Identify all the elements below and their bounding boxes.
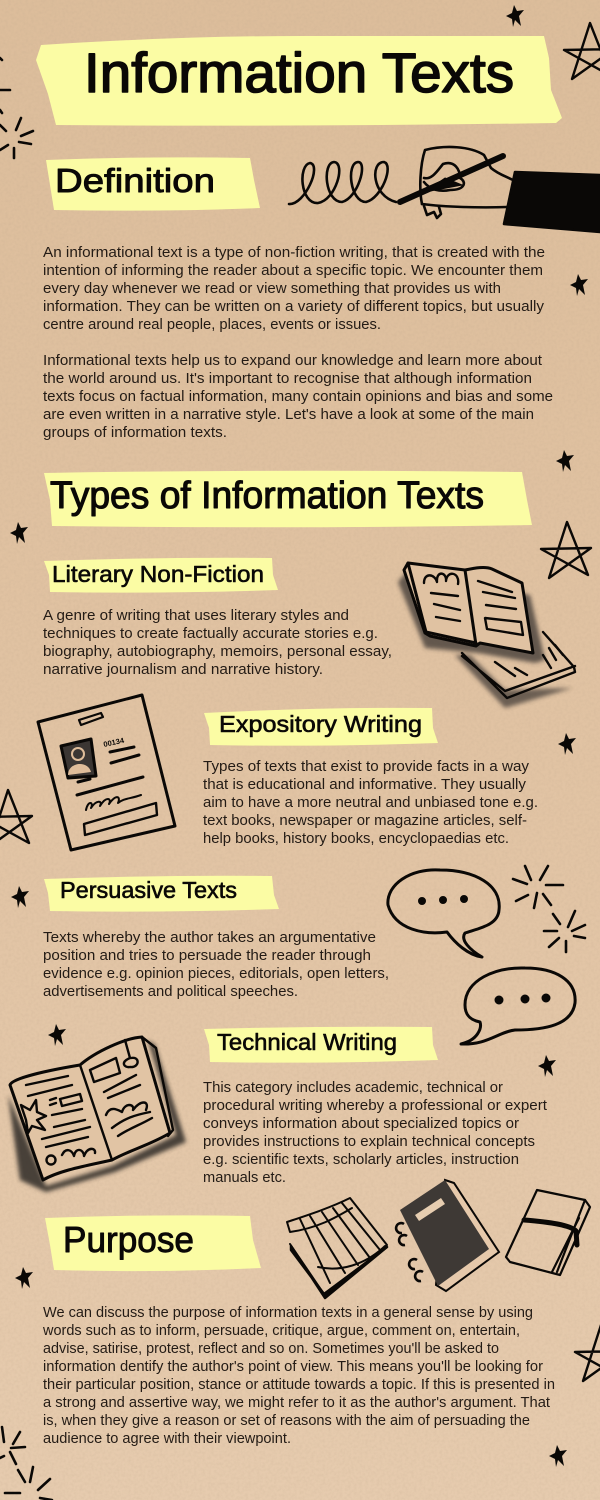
text block: definition: texts focus on factual information, many contain opinions and bias and some [43, 389, 553, 405]
text block: literary non-fiction: techniques to create factually accurate stories e.g. [43, 626, 378, 642]
text block: literary non-fiction: A genre of writing that uses literary styles and [43, 608, 349, 624]
heading: literary non-fiction: Literary Non-Fiction [52, 561, 264, 587]
icon: speech bubble one [388, 870, 499, 957]
text block: technical writing: e.g. scientific texts, scholarly articles, instruction [203, 1152, 519, 1168]
text block: expository writing: text books, newspaper or magazine articles, self- [203, 813, 527, 829]
text block: definition: the world around us. It's important to recognise that although information [43, 371, 532, 387]
text block: literary non-fiction [43, 608, 392, 678]
text block: definition: Informational texts help us to expand our knowledge and learn more about [43, 353, 542, 369]
icon: hand writing with pen [289, 147, 600, 232]
text block: purpose: We can discuss the purpose of information texts in a general sense by using [43, 1305, 533, 1321]
heading: types of information texts: Types of Information Texts [50, 475, 484, 517]
text block: definition: intention of informing the reader about a specific topic. We encounter them [43, 263, 543, 279]
heading: technical writing [204, 1027, 438, 1063]
icon: speech bubble two [461, 968, 575, 1044]
text block: purpose: is, when they give a reason or set of reasons with the aim of persuading the [43, 1413, 530, 1429]
heading: purpose [45, 1215, 261, 1271]
text block: definition [43, 245, 553, 441]
heading: expository writing [204, 708, 438, 746]
text block: persuasive texts: evidence e.g. opinion pieces, editorials, open letters, [43, 966, 389, 982]
heading: purpose: Purpose [63, 1219, 194, 1260]
icon: dark spiral notebook [396, 1180, 499, 1291]
text block: definition: are even written in a narrative style. Let's have a look at some of the main [43, 407, 534, 423]
title [36, 36, 562, 126]
heading: definition: Definition [55, 162, 215, 199]
icon: open notebook [8, 1037, 186, 1192]
text block: purpose: their particular position, stance or attitude towards a topic. If this is presented in [43, 1377, 555, 1393]
icon: open books [398, 563, 575, 708]
icon: notebook with strap [506, 1190, 590, 1275]
heading: expository writing: Expository Writing [219, 711, 422, 737]
text block: purpose: words such as to inform, persuade, critique, argue, comment on, entertain, [42, 1323, 520, 1339]
text block: definition: groups of information texts. [43, 425, 227, 441]
text block: expository writing: Types of texts that exist to provide facts in a way [203, 759, 530, 775]
text block: definition: every day whenever we read or view something that provides us with [43, 281, 501, 297]
text block: purpose: information dentify the author's point of view. This means you'll be looking for [43, 1359, 543, 1375]
text block: expository writing: that is educational and informative. They usually [203, 777, 527, 793]
text block: persuasive texts [43, 930, 389, 1000]
heading: definition [46, 157, 260, 211]
text block: purpose: a strong and assertive way, we might refer to it as the author's argument. That [43, 1395, 550, 1411]
text block: technical writing: manuals etc. [203, 1170, 286, 1186]
text block: literary non-fiction: biography, autobiography, memoirs, personal essay, [43, 644, 392, 660]
text block: expository writing: help books, history books, encyclopaedias etc. [203, 831, 509, 847]
heading: literary non-fiction [44, 558, 278, 593]
text block: definition: centre around real people, places, events or issues. [43, 317, 381, 333]
text block: technical writing [203, 1080, 547, 1186]
heading: types of information texts [44, 471, 532, 527]
text block: expository writing [203, 759, 538, 847]
icon: id badge: 00134 [103, 736, 126, 749]
text block: persuasive texts: Texts whereby the author takes an argumentative [43, 930, 376, 946]
text block: technical writing: procedural writing whereby a professional or expert [203, 1098, 547, 1114]
text block: definition: information. They can be written on a variety of different topics, but usually [43, 299, 545, 315]
text block: persuasive texts: position and tries to persuade the reader through [43, 948, 371, 964]
heading: technical writing: Technical Writing [217, 1029, 397, 1055]
text block: purpose: advise, satirise, protest, reflect and so on. Sometimes you'll be asked to [43, 1341, 499, 1357]
heading: persuasive texts [44, 876, 279, 912]
text block: technical writing: provides instructions to explain technical concepts [203, 1134, 535, 1150]
text block: literary non-fiction: narrative journalism and narrative history. [43, 662, 323, 678]
title: Information Texts [84, 41, 514, 104]
heading: persuasive texts: Persuasive Texts [60, 877, 237, 903]
text block: persuasive texts: advertisements and political speeches. [43, 984, 298, 1000]
text block: technical writing: conveys information about specialized topics or [203, 1116, 519, 1132]
text block: technical writing: This category includes academic, technical or [203, 1080, 503, 1096]
icon: id badge [38, 695, 175, 850]
text block: purpose: audience to agree with their viewpoint. [43, 1431, 291, 1447]
icon: notepad [287, 1198, 387, 1298]
text block: expository writing: aim to have a more neutral and unbiased tone e.g. [203, 795, 538, 811]
text block: purpose [42, 1305, 555, 1447]
text block: definition: An informational text is a type of non-fiction writing, that is created with the [43, 245, 545, 261]
